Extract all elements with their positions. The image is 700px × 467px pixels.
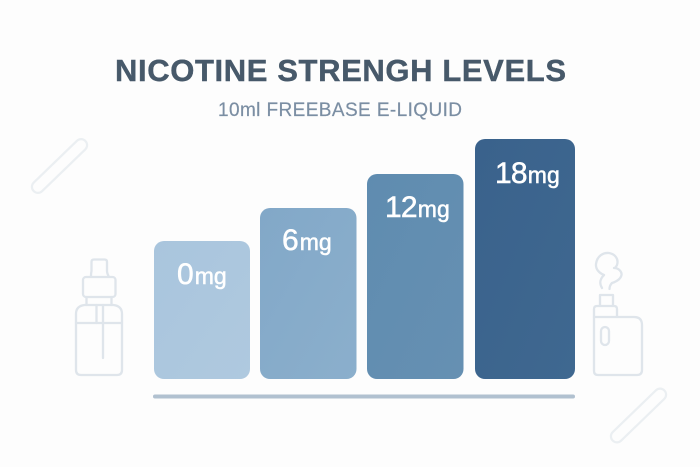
bar: 0mg: 0mg: [177, 258, 227, 291]
decorative stick: bottom right: [608, 386, 669, 445]
subtitle: 10ml FREEBASE E-LIQUID: [218, 100, 462, 121]
title: NICOTINE STRENGH LEVELS: [115, 53, 566, 88]
bar: 18mg: [475, 139, 575, 379]
bar: 6mg: [260, 208, 356, 379]
bar: 12mg: 12mg: [385, 191, 450, 224]
icon: vape device with smoke: [594, 253, 642, 375]
bar: 6mg: 6mg: [282, 224, 332, 257]
decorative stick: top left: [29, 137, 90, 195]
bar: 18mg: 18mg: [495, 157, 560, 190]
icon: e-liquid dropper bottle: [76, 260, 122, 375]
bar: 12mg: [367, 174, 464, 379]
baseline axis: [153, 394, 575, 398]
bar: 0mg: [154, 241, 250, 379]
